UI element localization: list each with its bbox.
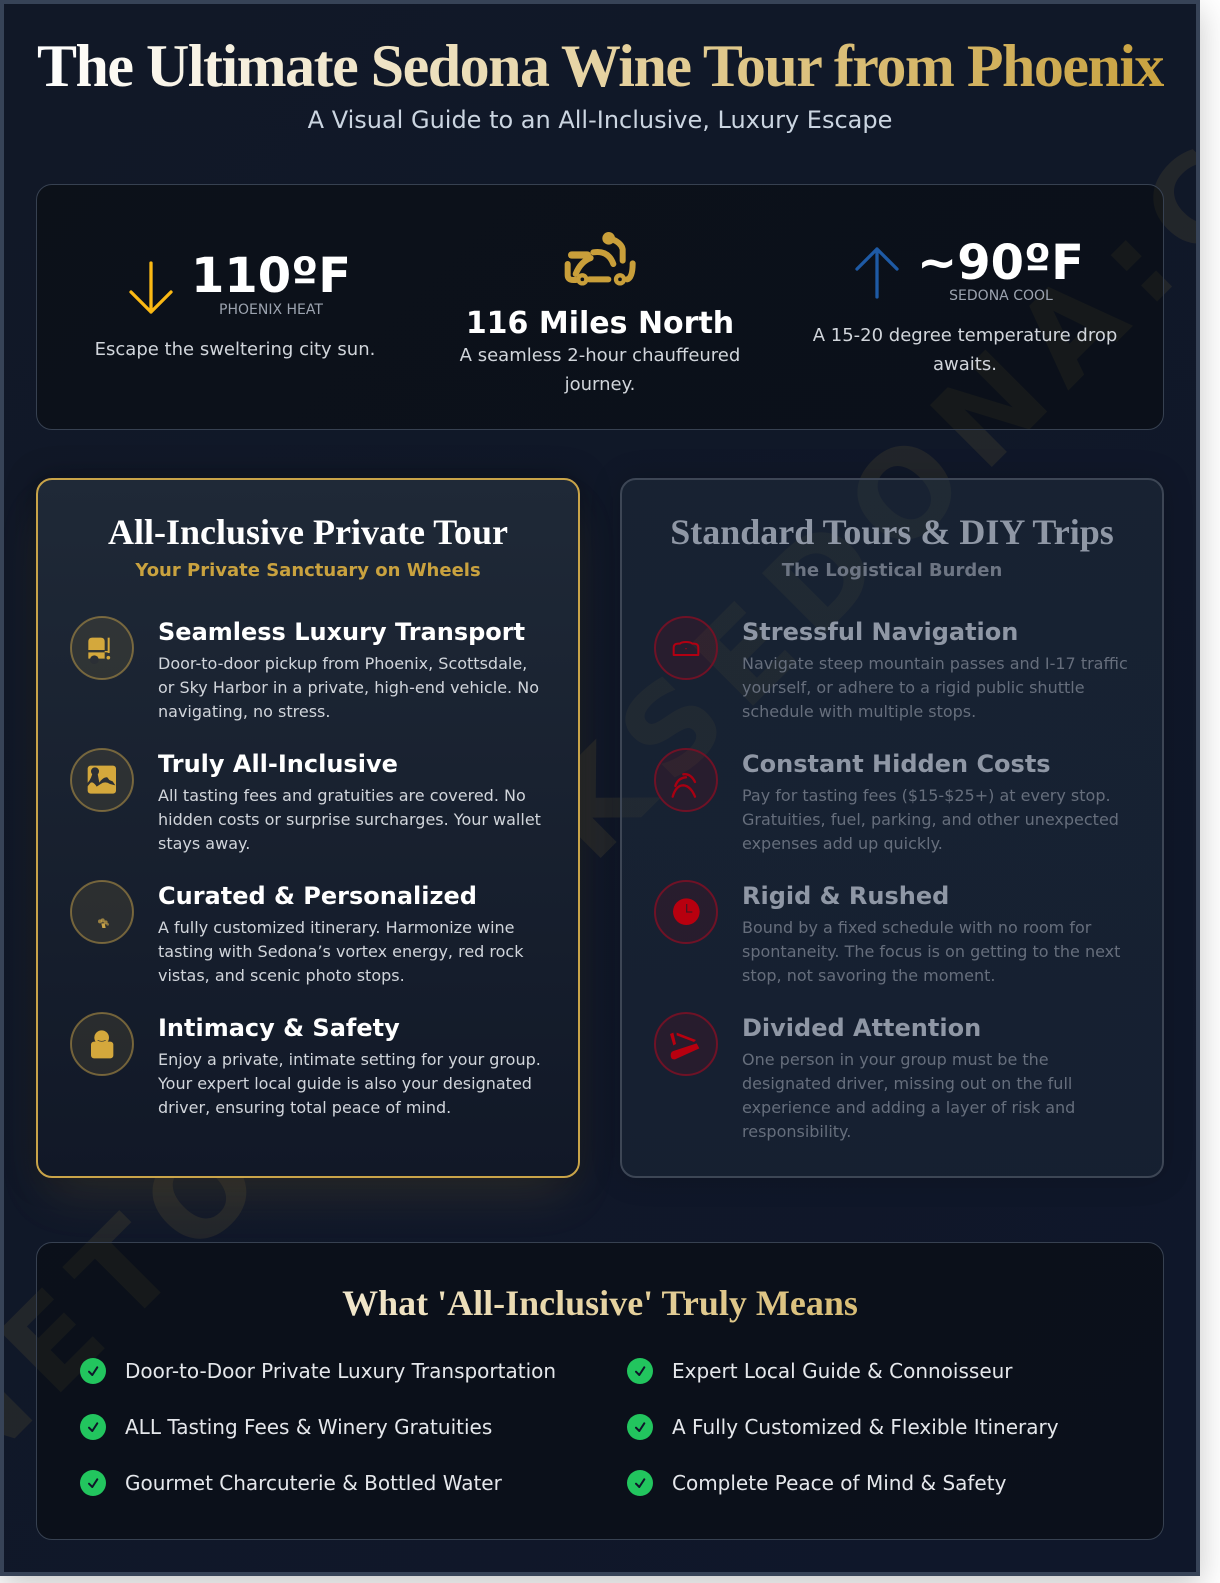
item: truly all-inclusive	[70, 748, 541, 853]
description: Escape the sweltering city sun.	[95, 339, 375, 360]
text	[742, 654, 1128, 721]
text	[158, 786, 541, 853]
panel: trip stats	[36, 184, 1164, 430]
icon: divided arrow	[654, 1012, 718, 1076]
heading: Divided Attention	[742, 1014, 981, 1042]
text: All tasting fees and gratuities are covered. No	[158, 786, 526, 805]
checklist item: Door-to-Door Private Luxury Transportation	[125, 1359, 556, 1383]
text: Your expert local guide is also your designated	[158, 1074, 532, 1093]
icon: up arrow	[855, 247, 899, 299]
icon: vehicle	[70, 616, 134, 680]
item: constant hidden costs	[654, 748, 1119, 853]
text	[158, 918, 524, 985]
text: or Sky Harbor in a private, high-end vehicle. No	[158, 678, 539, 697]
checklist item: Complete Peace of Mind & Safety	[672, 1471, 1006, 1495]
text: designated driver, missing out on the full	[742, 1074, 1072, 1093]
panel: standard tours and DIY trips	[620, 478, 1164, 1178]
text: Bound by a fixed schedule with no room for	[742, 918, 1091, 937]
temperature: 110ºF	[191, 248, 351, 304]
title: The Ultimate Sedona Wine Tour from Phoenix	[37, 33, 1163, 99]
checklist item: Gourmet Charcuterie & Bottled Water	[125, 1471, 502, 1495]
text: One person in your group must be the	[742, 1050, 1049, 1069]
heading: Curated & Personalized	[158, 882, 477, 910]
text: Enjoy a private, intimate setting for your group.	[158, 1050, 541, 1069]
panel subheading: The Logistical Burden	[782, 560, 1002, 581]
panel heading: All-Inclusive Private Tour	[108, 512, 508, 552]
heading: Stressful Navigation	[742, 618, 1018, 646]
description: A seamless 2-hour chauffeured	[460, 345, 740, 366]
text	[742, 1050, 1075, 1141]
item: rigid and rushed	[654, 880, 1120, 985]
label: PHOENIX HEAT	[219, 302, 323, 318]
icon: down arrow	[129, 261, 173, 314]
text: responsibility.	[742, 1122, 851, 1141]
description: awaits.	[933, 354, 997, 375]
text	[742, 786, 1119, 853]
text: driver, ensuring total peace of mind.	[158, 1098, 451, 1117]
checklist item: Expert Local Guide & Connoisseur	[672, 1359, 1013, 1383]
panel subheading: Your Private Sanctuary on Wheels	[135, 560, 481, 581]
text: A fully customized itinerary. Harmonize wine	[158, 918, 515, 937]
text: vistas, and scenic photo stops.	[158, 966, 405, 985]
text: tasting with Sedona’s vortex energy, red rock	[158, 942, 523, 961]
stat: distance	[460, 232, 740, 395]
text: Gratuities, fuel, parking, and other unexpected	[742, 810, 1119, 829]
text: yourself, or adhere to a rigid public shuttle	[742, 678, 1085, 697]
text: hidden costs or surprise surcharges. Your wallet	[158, 810, 541, 829]
item: intimacy and safety	[70, 1012, 541, 1117]
heading: Rigid & Rushed	[742, 882, 949, 910]
text: expenses add up quickly.	[742, 834, 943, 853]
text	[742, 918, 1120, 985]
icon: vehicle	[564, 232, 636, 286]
item: curated and personalized	[70, 880, 524, 985]
description: journey.	[565, 374, 635, 395]
text: Door-to-door pickup from Phoenix, Scottsdale,	[158, 654, 527, 673]
text: Pay for tasting fees ($15-$25+) at every stop.	[742, 786, 1111, 805]
text: spontaneity. The focus is on getting to the next	[742, 942, 1120, 961]
item: stressful navigation	[654, 616, 1128, 721]
heading	[37, 1280, 1163, 1326]
icon: landscape	[70, 748, 134, 812]
text: stays away.	[158, 834, 250, 853]
heading: Constant Hidden Costs	[742, 750, 1051, 778]
heading: Seamless Luxury Transport	[158, 618, 525, 646]
text: stop, not savoring the moment.	[742, 966, 995, 985]
heading: Intimacy & Safety	[158, 1014, 400, 1042]
description: A 15-20 degree temperature drop	[813, 325, 1117, 346]
description	[812, 325, 1117, 375]
text	[158, 1050, 541, 1117]
icon: flower	[70, 880, 134, 944]
text: navigating, no stress.	[158, 702, 330, 721]
label: SEDONA COOL	[949, 288, 1053, 304]
stat: Sedona cool	[812, 235, 1117, 375]
heading: What 'All-Inclusive' Truly Means	[342, 1283, 858, 1323]
text: experience and adding a layer of risk and	[742, 1098, 1075, 1117]
distance: 116 Miles North	[466, 306, 734, 341]
text	[158, 654, 539, 721]
checklist item: ALL Tasting Fees & Winery Gratuities	[125, 1415, 492, 1439]
text: Navigate steep mountain passes and I-17 traffic	[742, 654, 1128, 673]
panel: what all-inclusive means	[36, 1242, 1164, 1540]
panel: all-inclusive private tour	[36, 478, 580, 1178]
icon: navigation	[654, 616, 718, 680]
temperature: ~90ºF	[917, 235, 1084, 291]
icon: clock	[654, 880, 718, 944]
heading: Truly All-Inclusive	[158, 750, 398, 778]
text: schedule with multiple stops.	[742, 702, 976, 721]
stat: Phoenix heat	[95, 248, 375, 360]
subtitle: A Visual Guide to an All-Inclusive, Luxury Escape	[308, 106, 892, 134]
panel heading: Standard Tours & DIY Trips	[670, 512, 1114, 552]
item: divided attention	[654, 1012, 1075, 1141]
icon: lock	[70, 1012, 134, 1076]
icon: coins	[654, 748, 718, 812]
checklist item: A Fully Customized & Flexible Itinerary	[672, 1415, 1059, 1439]
item: seamless luxury transport	[70, 616, 539, 721]
description	[460, 345, 740, 395]
